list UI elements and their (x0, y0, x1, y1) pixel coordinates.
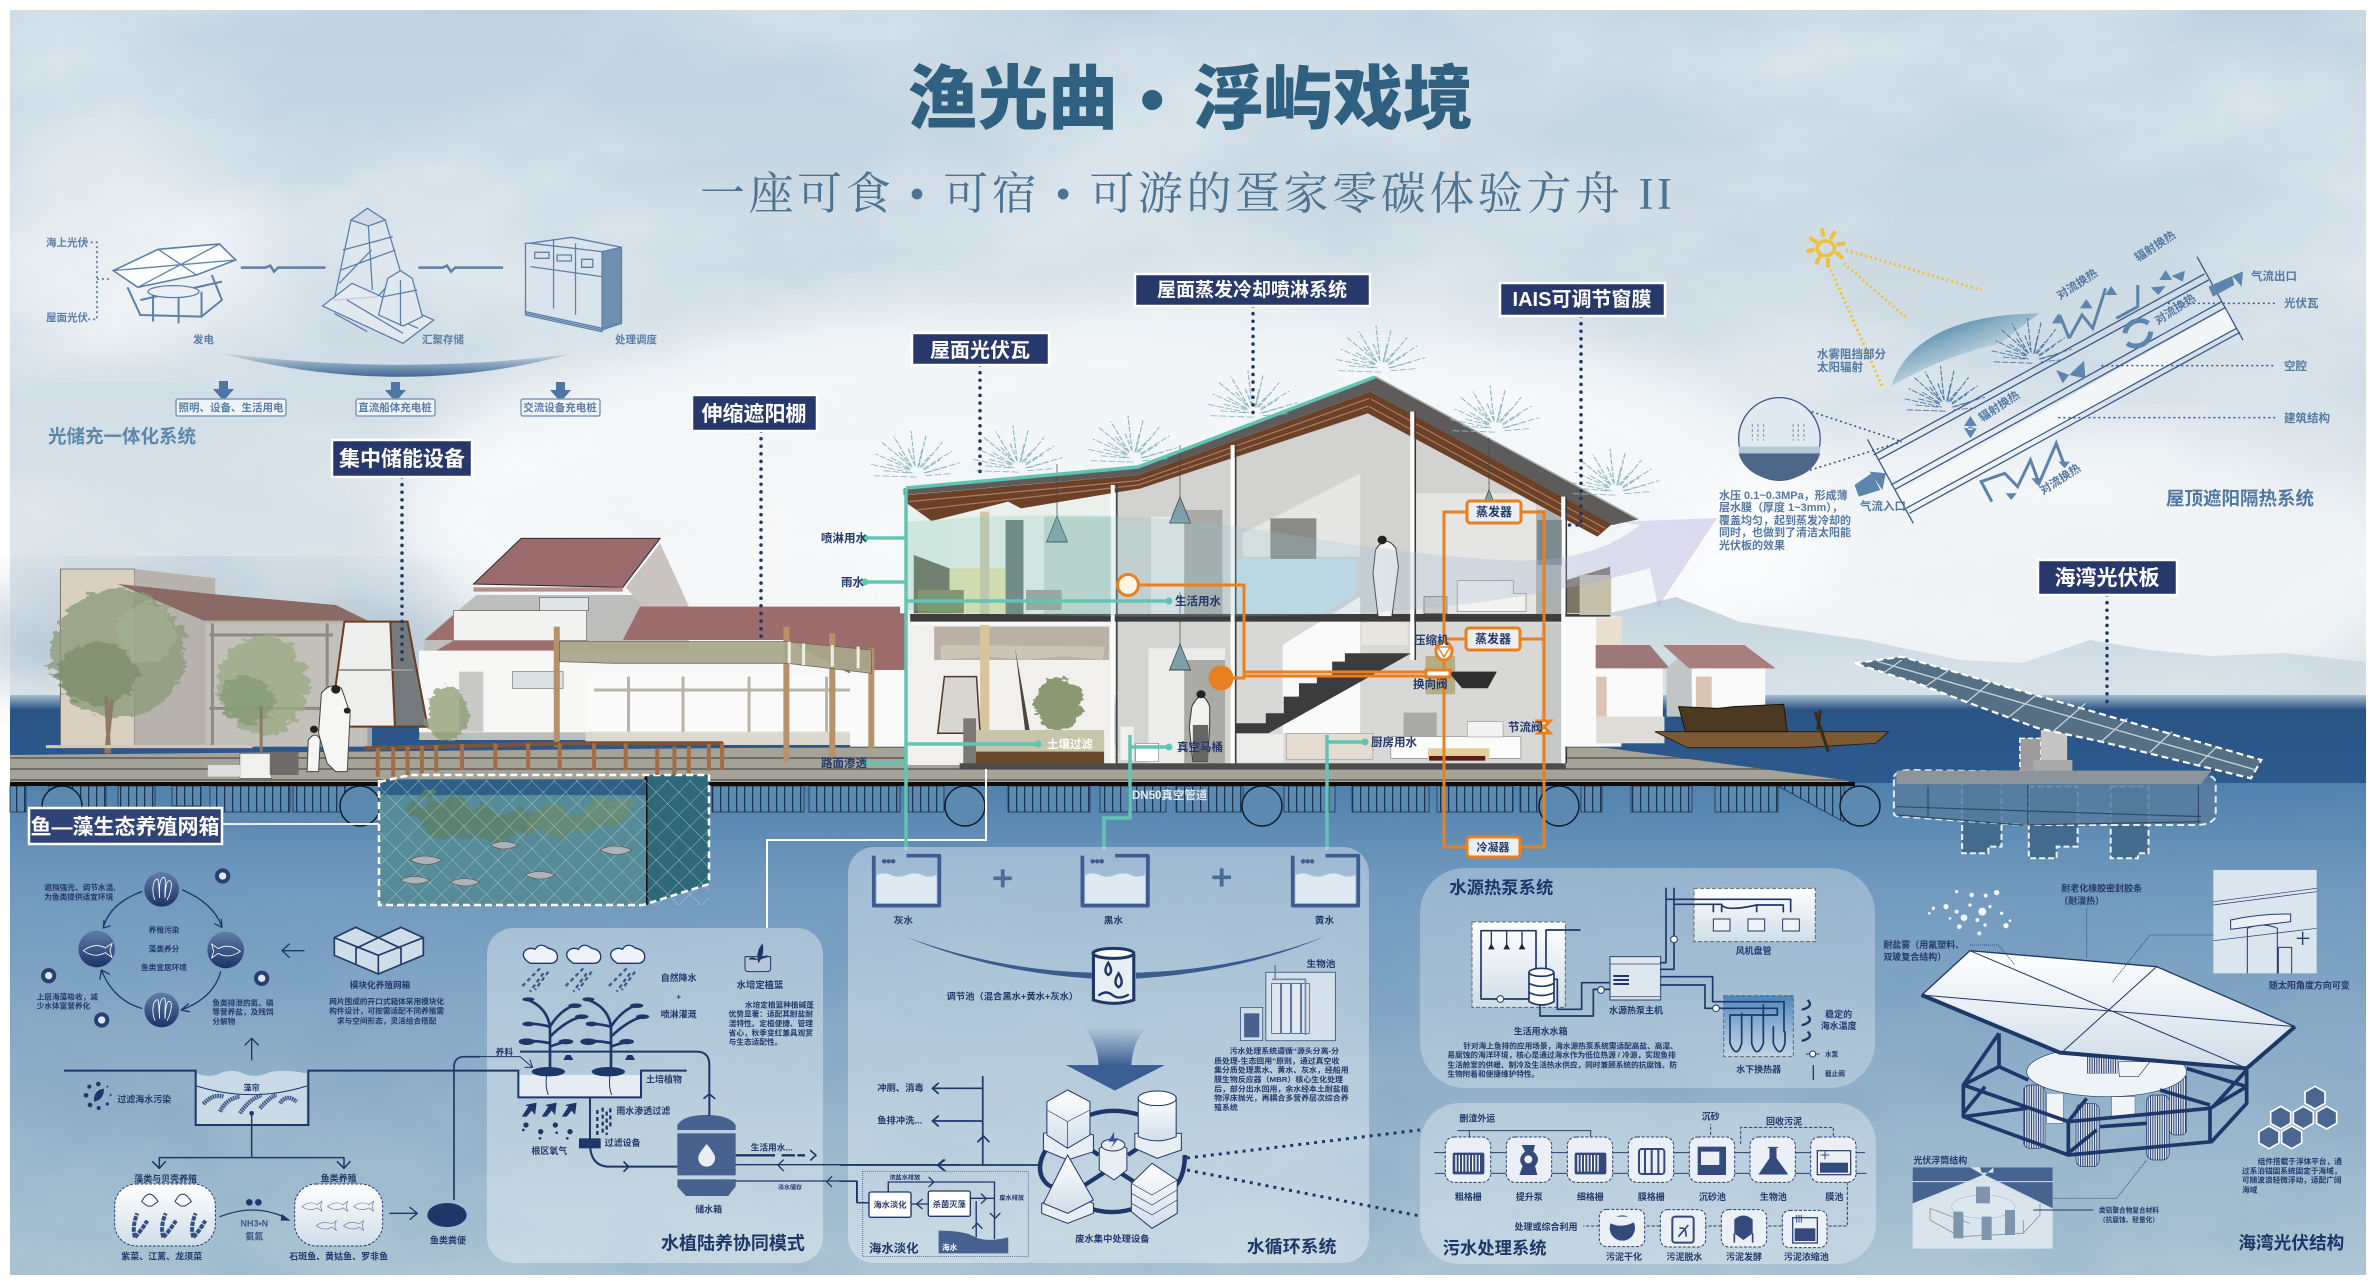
wind flow band (906, 515, 1717, 617)
disk platform (2027, 1047, 2187, 1097)
underwater background (10, 783, 2366, 1275)
bio pool note: 污水处理系统遵循“源头分离-分 (1230, 1046, 1339, 1056)
seaweed filter section (64, 1038, 480, 1168)
house annotations: 路面渗透 (821, 756, 867, 770)
panel: 光储充一体化系统: 光储充一体化系统 (48, 426, 196, 447)
panel: 海湾光伏结构: 可随波浪轻微浮动，适配广阔 (2242, 1175, 2342, 1185)
storage tank (677, 1094, 960, 1215)
house annotations: 蒸发器 (1475, 631, 1511, 646)
house annotations: 压缩机 (1414, 633, 1449, 647)
panel: 海湾光伏结构: 组件搭载于浮体平台，通 (2258, 1156, 2342, 1166)
callout dotted leaders (402, 306, 2107, 706)
callout: 海湾光伏板 (2038, 560, 2177, 595)
icon: modular cage: 求与空间形态，灵活组合搭配 (337, 1015, 437, 1025)
rain clouds: + (676, 992, 681, 1001)
panel: 屋顶遮阳隔热系统: 同时，也做到了清洁太阳能 (1719, 525, 1851, 539)
lower floor (1118, 622, 1233, 765)
process labels: 删渣外运 (1459, 1113, 1495, 1124)
deck platform (10, 743, 1856, 785)
inset: tilt joint: 随太阳角度方向可变 (2269, 980, 2350, 991)
house annotations (821, 504, 1542, 854)
house annotations: 土壤过滤 (1047, 737, 1093, 751)
left village buildings (26, 538, 900, 747)
process tiles upper (1445, 1137, 1856, 1182)
panel: 光储充一体化系统: 交流设备充电桩 (523, 401, 597, 414)
process labels: 回收污泥 (1766, 1116, 1802, 1127)
house annotations: 节流阀 (1508, 720, 1542, 734)
panel: 海湾光伏结构 (1883, 870, 2350, 1253)
panel: 光储充一体化系统: 汇聚存储 (422, 333, 464, 346)
inset: tilt joint (2113, 870, 2350, 991)
desalination box: 杀菌灭藻 (933, 1199, 966, 1209)
treatment plant (1040, 1090, 1185, 1244)
subtitle: 一座可食 • 可宿 • 可游的疍家零碳体验方舟 II (700, 169, 1672, 219)
callout: IAIS可调节窗膜 (1500, 283, 1665, 316)
algae and fish farming: 藻类与贝壳养殖 (134, 1173, 197, 1184)
people (1373, 541, 1398, 617)
process labels: 处理或综合利用 (1515, 1221, 1577, 1232)
panel: 光储充一体化系统: 海上光伏 (46, 236, 88, 249)
planting basket note: 优势显著：适配其耐盐耐 (729, 1009, 813, 1019)
desalination box: 海水 (942, 1242, 958, 1252)
teal water pipes (862, 377, 1375, 850)
panel: 光储充一体化系统: 屋面光伏 (46, 311, 88, 324)
steel frame (1963, 1033, 2247, 1155)
house annotations: 厨房用水 (1371, 735, 1417, 749)
plants tub: 根区氧气 (531, 1145, 567, 1156)
desalination box: 海水淡化 (873, 1199, 907, 1209)
underwater heat exchanger: 水泵 (1825, 1050, 1839, 1059)
panel: 光储充一体化系统: 直流船体充电桩 (358, 401, 432, 414)
roof panel (1922, 951, 2295, 1068)
callout: 集中储能设备: 集中储能设备 (339, 448, 465, 471)
columns (1113, 412, 1563, 763)
floats (2023, 1073, 2187, 1167)
planting basket note: 湿特性。定植便捷、管理 (729, 1018, 813, 1028)
process labels: 提升泵 (1516, 1191, 1543, 1202)
panel: 屋顶遮阳隔热系统: 对流换热 (2037, 460, 2084, 498)
bio pool note: 殖系统 (1214, 1102, 1238, 1112)
callout: 海湾光伏板: 海湾光伏板 (2054, 566, 2160, 590)
panel: 屋顶遮阳隔热系统: 太阳辐射 (1817, 360, 1863, 374)
dotted connectors to water-system diagrams (1187, 1130, 1420, 1216)
cycle diagram: 等营养盐，及残饵 (212, 1007, 274, 1017)
underwater heat exchanger (1661, 977, 1857, 1080)
panel: 水循环系统 background (848, 847, 1369, 1263)
panel: 屋顶遮阳隔热系统: 对流换热 (2054, 265, 2101, 303)
fan coil units (1661, 888, 1815, 969)
rain clouds: 喷淋灌溉 (661, 1008, 697, 1019)
panel: 光储充一体化系统 (46, 208, 657, 447)
right village and boat (1565, 617, 1889, 752)
icon: modular cage: 网片围成的开口式箱体采用模块化 (329, 996, 444, 1006)
process labels: 膜格栅 (1638, 1191, 1665, 1202)
title: • (1140, 60, 1165, 138)
inset: float structure: （抗腐蚀、轻量化） (2099, 1215, 2159, 1224)
process labels: 细格栅 (1577, 1191, 1604, 1202)
cycle diagram: 遮挡强光、调节水温, (44, 882, 115, 892)
domestic tank (1472, 922, 1610, 1036)
panel: 屋顶遮阳隔热系统: 气流出口 (2251, 269, 2297, 283)
central dwelling section (850, 377, 1638, 769)
bio pool note: 集分质处理黑水、黄水、灰水，经船用 (1214, 1065, 1349, 1075)
bio pool note (1214, 958, 1349, 1112)
planting basket note: 省心，秋季变红兼具观赏 (729, 1027, 813, 1037)
inset: float structure (1913, 1154, 2159, 1249)
hex modules (2259, 1086, 2337, 1149)
storage tower and trees (46, 588, 871, 778)
heading: 海湾光伏结构: 海湾光伏结构 (2238, 1232, 2344, 1253)
bio pool note: 物浮床抛光，再耦合多营养层次综合养 (1214, 1093, 1349, 1103)
callout: 屋面蒸发冷却喷淋系统 (1135, 274, 1370, 306)
panel: 水源热泵系统 (1447, 877, 1857, 1080)
source tanks: 黄水 (1315, 915, 1335, 927)
callout: IAIS可调节窗膜: IAIS可调节窗膜 (1513, 288, 1651, 311)
inset: float structure: 光伏浮筒结构 (1913, 1154, 1967, 1165)
rain clouds: 自然降水 (661, 972, 697, 983)
source tanks (874, 856, 1358, 927)
bio pool note: 后，部分出水回用，余水经本土耐盐植 (1214, 1083, 1349, 1093)
panel: 水植陆养协同模式 (480, 943, 960, 1253)
house annotations: 喷淋用水 (821, 531, 867, 545)
house annotations: 雨水 (841, 575, 864, 589)
algae and fish farming: 紫菜、江蓠、龙须菜 (121, 1250, 202, 1261)
description: 生物附着和便捷维护特性。 (1447, 1069, 1539, 1079)
floats under deck (10, 784, 1880, 826)
panel: 水源热泵系统 background (1420, 868, 1875, 1088)
storage tank: 储水箱 (695, 1204, 722, 1215)
cycle diagram: 分解物 (212, 1016, 236, 1026)
fan coil units: 风机盘管 (1736, 945, 1772, 956)
algae and fish farming: 鱼类养殖 (321, 1172, 357, 1183)
annotations: 耐盐雾（用氟塑料、 (1883, 939, 1964, 950)
cycle diagram: 为鱼类提供适宜环境 (44, 891, 114, 901)
panel: 屋顶遮阳隔热系统: 水压 0.1~0.3MPa，形成薄 (1719, 488, 1848, 502)
description: 针对海上鱼排的应用场景，海水源热泵系统需适配高盐、高湿、 (1463, 1040, 1678, 1050)
panel: 屋顶遮阳隔热系统: 层水膜（厚度 1~3mm）， (1719, 500, 1843, 514)
icon: modular cage (282, 927, 444, 1025)
desalination box: 浓盐水排放 (889, 1173, 920, 1181)
title: 渔光曲 (908, 60, 1118, 138)
panel: 屋顶遮阳隔热系统: 覆盖均匀，起到蒸发冷却的 (1719, 513, 1851, 527)
panel: 屋顶遮阳隔热系统: 辐射换热 (1976, 387, 2023, 425)
callout: 伸缩遮阳棚 (692, 395, 817, 431)
courtyard (905, 625, 1112, 765)
railing (364, 743, 723, 748)
callout: 伸缩遮阳棚: 伸缩遮阳棚 (702, 402, 806, 426)
house annotations: 真空马桶 (1177, 740, 1223, 754)
underwater heat exchanger: 截止阀 (1825, 1069, 1845, 1078)
process labels: 生物池 (1760, 1191, 1787, 1202)
house annotations: 换向阀 (1413, 677, 1448, 691)
bio pool note: 膜生物反应器（MBR）核心生化处理 (1214, 1074, 1343, 1084)
cycle diagram (37, 868, 274, 1028)
process labels (1455, 1110, 1843, 1262)
pendant lamps (1046, 438, 1500, 670)
heat pump host: 水源热泵主机 (1609, 1005, 1663, 1016)
planting basket note: 水培定植篮种植碱蓬 (745, 999, 814, 1009)
planting basket note: 与生态适配性。 (729, 1037, 782, 1047)
interior walls (1115, 397, 1564, 765)
boat (1655, 732, 1889, 748)
panel: 光储充一体化系统: 发电 (193, 333, 214, 346)
panel: 水植陆养协同模式 background (487, 928, 823, 1263)
icon: sun (1808, 230, 1981, 387)
annotations (1883, 882, 2142, 965)
inset: float structure: 类铝聚合物复合材料 (2099, 1206, 2159, 1215)
cycle diagram: 少水体富营养化 (37, 1001, 91, 1011)
process labels: 污泥浓缩池 (1784, 1251, 1829, 1262)
cycle diagram: 养殖污染 (149, 925, 180, 935)
bio pool note: 生物池 (1307, 958, 1336, 970)
panel: 屋顶遮阳隔热系统: 气流入口 (1860, 499, 1906, 513)
callout: 鱼藻生态养殖网箱: 鱼—藻生态养殖网箱 (30, 815, 220, 839)
house annotations: 冷凝器 (1476, 840, 1510, 854)
description: 生活舱室的供暖、制冷及生活热水供应，同时兼顾系统的抗腐蚀、防 (1447, 1059, 1677, 1069)
regulating pool: 调节池（混合黑水+黄水+灰水） (947, 990, 1078, 1001)
storage tank: 淡水储存 (778, 1183, 802, 1191)
panel: 屋顶遮阳隔热系统: 光伏板的效果 (1719, 538, 1785, 552)
panel: 屋顶遮阳隔热系统: 对流换热 (2152, 290, 2199, 328)
panel: 光储充一体化系统: 处理调度 (615, 333, 657, 346)
house annotations: 生活用水 (1175, 594, 1221, 608)
heat pump host (1609, 957, 1663, 1016)
panel: 屋顶遮阳隔热系统 (1719, 227, 2330, 552)
underwater heat exchanger: 海水温度 (1821, 1020, 1857, 1031)
process tiles lower (1599, 1209, 1827, 1248)
cycle diagram: 上层海藻吸收，减 (37, 991, 98, 1001)
outlet branches (840, 1077, 1040, 1170)
algae and fish farming: 鱼类粪便 (430, 1234, 466, 1245)
panel: 屋顶遮阳隔热系统: 建筑结构 (2284, 411, 2330, 425)
panel: 屋顶遮阳隔热系统: 屋顶遮阳隔热系统 (2166, 488, 2314, 509)
process labels: 污泥发酵 (1726, 1251, 1762, 1262)
panel: 屋顶遮阳隔热系统: 水雾阻挡部分 (1817, 347, 1886, 361)
distant mountains (1590, 597, 2366, 705)
planting basket note: 水培定植篮 (737, 979, 783, 990)
description: 易腐蚀的海洋环境，核心是通过海水作为低位热源 / 冷源，实现鱼排 (1447, 1050, 1676, 1060)
wood beams and roof (907, 392, 1613, 537)
heading: 污水处理系统: 污水处理系统 (1443, 1238, 1547, 1258)
plants tub: 过滤设备 (605, 1137, 641, 1148)
regulating pool (906, 937, 1324, 1091)
seaweed filter section: 过滤海水污染 (117, 1094, 171, 1105)
process labels: 污泥脱水 (1666, 1251, 1702, 1262)
fish cage (222, 755, 986, 928)
cycle diagram: 鱼类排泄的氮、磷 (212, 997, 274, 1007)
house annotations: DN50真空管道 (1132, 788, 1208, 802)
visitors (319, 686, 350, 772)
panel: 海湾光伏结构: 过系泊锚固系统固定于海域， (2242, 1165, 2342, 1175)
window film (1537, 520, 1562, 565)
sprinkler bursts on roof (870, 326, 1659, 495)
orange heat pump pipes (1118, 501, 1550, 857)
panel: 屋顶遮阳隔热系统: 空腔 (2284, 359, 2308, 373)
panel: 水循环系统 (840, 856, 1358, 1257)
description (1447, 1040, 1678, 1079)
seaweed filter section: 藻帘 (244, 1083, 260, 1093)
bio pool note: 质处理-生态回用”原则，通过真空收 (1214, 1055, 1340, 1065)
process labels: 污泥干化 (1606, 1251, 1642, 1262)
outlet branches: 鱼排冲洗... (877, 1115, 922, 1126)
callout: 屋面蒸发冷却喷淋系统: 屋面蒸发冷却喷淋系统 (1157, 278, 1347, 301)
sea horizon (10, 695, 2366, 787)
house annotations: 蒸发器 (1476, 504, 1512, 519)
process labels: 膜池 (1825, 1191, 1843, 1202)
rain clouds (522, 945, 697, 1019)
heading: 水植陆养协同模式: 水植陆养协同模式 (661, 1232, 805, 1253)
algae and fish farming: 石斑鱼、黄姑鱼、罗非鱼 (289, 1250, 388, 1261)
panel: 光储充一体化系统: 照明、设备、生活用电 (178, 401, 284, 414)
annotations: 耐老化橡胶密封胶条 (2061, 882, 2142, 893)
icon: modular cage: 模块化养殖网箱 (350, 979, 411, 990)
panel: 鱼藻生态循环 (37, 868, 480, 1261)
title: 浮屿戏境 (1193, 60, 1473, 138)
floor slabs (910, 614, 1610, 622)
underwater heat exchanger: 水下换热器 (1736, 1063, 1781, 1074)
callout: 集中储能设备 (332, 440, 472, 477)
desalination box: 废水排放 (999, 1194, 1024, 1202)
annotations: 双玻复合结构） (1883, 951, 1946, 962)
cycle diagram: 鱼类宜居环境 (141, 962, 187, 972)
planting basket note (729, 943, 814, 1047)
underwater heat exchanger: 稳定的 (1825, 1009, 1852, 1020)
callout: 屋面光伏瓦: 屋面光伏瓦 (930, 338, 1030, 362)
storage tank: 生活用水... (751, 1142, 793, 1153)
callout: 屋面光伏瓦 (912, 333, 1049, 365)
plants tub: 土培植物 (646, 1073, 682, 1084)
algae and fish farming (115, 1057, 480, 1261)
clouds texture (0, 10, 2373, 780)
source tanks: 黑水 (1104, 915, 1124, 927)
desalination box: 海水淡化 (869, 1241, 919, 1256)
panel: 污水处理系统 (1434, 1110, 1867, 1262)
algae and fish farming: NH3•N (241, 1218, 268, 1228)
heading: 水循环系统: 水循环系统 (1247, 1236, 1337, 1256)
outlet branches: 冲厕、消毒 (877, 1082, 924, 1093)
process labels: 粗格栅 (1455, 1191, 1482, 1202)
sunshade canopy (557, 627, 871, 762)
panel: 污水处理系统 background (1420, 1103, 1876, 1264)
plants tub: 养料 (496, 1046, 513, 1057)
panel: 海湾光伏结构: 海域 (2242, 1184, 2258, 1194)
plants tub (480, 997, 709, 1171)
salt spray dots (1928, 890, 2011, 935)
treatment plant: 废水集中处理设备 (1075, 1233, 1150, 1244)
plants tub: 雨水渗透过滤 (616, 1105, 670, 1116)
process labels: 沉砂 (1702, 1110, 1720, 1121)
desalination box (840, 1171, 1028, 1257)
panel: 屋顶遮阳隔热系统: 辐射换热 (2132, 227, 2179, 265)
heading: 水源热泵系统 (1449, 877, 1553, 897)
domestic tank: 生活用水水箱 (1514, 1025, 1568, 1036)
cycle diagram: 藻类养分 (149, 943, 180, 953)
process labels: 沉砂池 (1699, 1191, 1726, 1202)
icon: modular cage: 构件设计，可按需适配不同养殖需 (329, 1005, 444, 1015)
source tanks: 灰水 (894, 915, 914, 927)
annotations: （耐湿热） (2059, 895, 2104, 906)
callout: 鱼藻生态养殖网箱 (29, 808, 222, 844)
panel: 屋顶遮阳隔热系统: 光伏瓦 (2284, 296, 2319, 310)
bay photovoltaic panel (1854, 657, 2261, 858)
algae and fish farming: 氨氮 (245, 1230, 263, 1241)
